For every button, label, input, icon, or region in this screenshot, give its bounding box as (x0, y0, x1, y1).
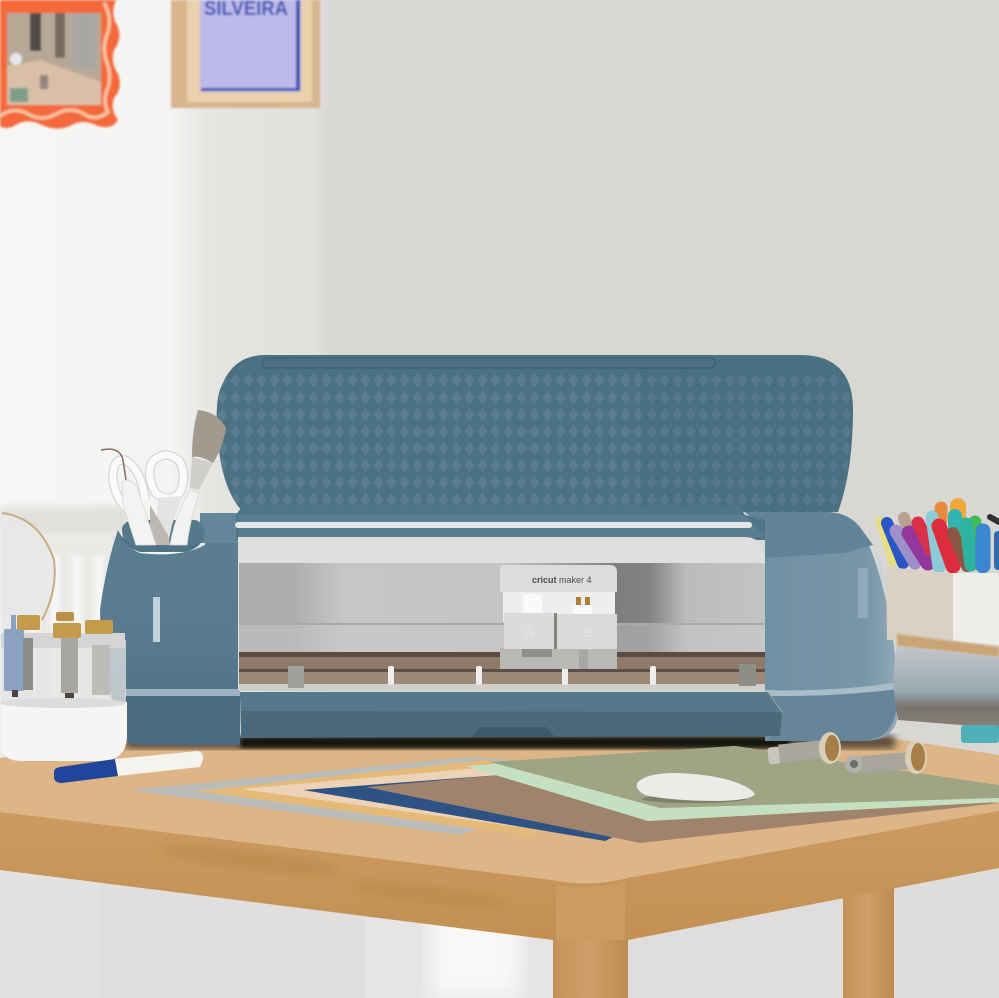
icon: weeding tool (101, 449, 126, 480)
machine right body (745, 512, 898, 741)
radiator on the left wall (0, 535, 120, 825)
icon: spatula (192, 410, 226, 463)
sheets of coloured material (130, 746, 999, 843)
wall frame: orange scalloped photo (0, 0, 120, 129)
machine top deck (235, 505, 765, 540)
carriage letter A: A (524, 624, 534, 640)
table: front edge and legs (0, 795, 999, 998)
sheet: navy (303, 775, 700, 841)
sheet: sage green (465, 746, 999, 821)
window sill shadow on the left wall (0, 506, 130, 536)
wall frame: blue poster (171, 0, 320, 108)
tool cup front lip (118, 525, 205, 552)
tools in the cup (101, 410, 226, 545)
machine front tray (240, 692, 782, 738)
sheet: grey (130, 757, 650, 835)
sheet: tan (195, 760, 650, 836)
roller tool 2 (845, 740, 927, 774)
cutting machine (100, 355, 898, 745)
lower wall and radiator under the table (0, 860, 999, 998)
sheet: brown (366, 775, 999, 843)
shadow beneath the machine (125, 735, 895, 749)
white scraper block (637, 773, 755, 803)
teal material tube (961, 725, 999, 743)
tool holder carousel (0, 513, 127, 761)
carriage brand label: cricut maker 4 (532, 575, 592, 585)
gold caps (17, 612, 113, 638)
clear dome (2, 513, 55, 620)
pens in organiser (880, 506, 999, 567)
organiser box (886, 567, 999, 645)
icon: scissors (113, 455, 184, 512)
white base (1, 702, 127, 761)
tool cup interior (122, 520, 204, 551)
carriage letter B: B (584, 624, 593, 640)
table: top surface (0, 738, 999, 884)
grey material roll (894, 646, 999, 728)
cutting carriage (500, 565, 617, 669)
blades (4, 629, 24, 691)
machine lid (217, 355, 853, 512)
machine left body with tool cup (100, 513, 240, 745)
roller tool 1 (767, 732, 841, 765)
clear holder body (1, 640, 126, 702)
small roller clips (388, 666, 656, 685)
shelf edge (897, 634, 999, 657)
desk organiser (880, 506, 999, 743)
blue and white marker (54, 751, 203, 783)
sheet: cream (240, 767, 650, 829)
machine interior opening (238, 537, 765, 691)
